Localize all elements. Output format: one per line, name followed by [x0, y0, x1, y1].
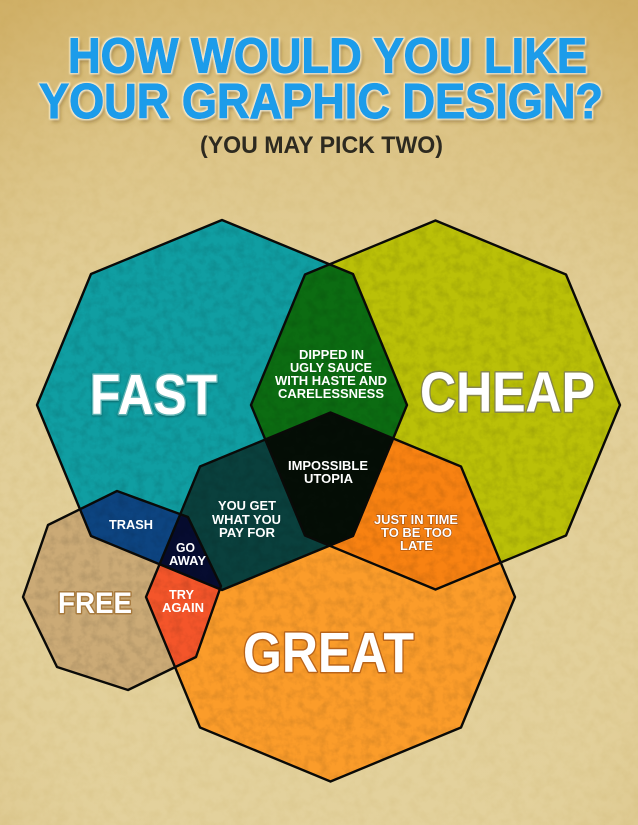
- text: go away: GO: [176, 540, 195, 555]
- circle: fast: [37, 220, 407, 590]
- venn diagram: [22, 218, 622, 783]
- overlap: fast and free: [82, 492, 179, 563]
- outlines: [23, 220, 620, 782]
- text: fast and cheap: CARELESSNESS: [278, 386, 384, 401]
- text: impossible utopia: [288, 458, 368, 486]
- text: you get what you pay for: PAY FOR: [219, 525, 276, 540]
- overlap: fast and cheap: [252, 266, 406, 438]
- overlap: fast, free and great: [161, 516, 220, 588]
- overlap: cheap and great: [333, 440, 499, 588]
- text: you get what you pay for: [212, 498, 281, 540]
- text: go away: AWAY: [169, 553, 206, 568]
- text: you get what you pay for: YOU GET: [218, 498, 276, 513]
- circle: cheap: [251, 220, 620, 590]
- text: just in time to be too late: LATE: [400, 538, 433, 553]
- circle: free: [23, 491, 221, 690]
- subtitle: (YOU MAY PICK TWO): [200, 132, 443, 159]
- label: cheap: CHEAP: [420, 360, 595, 424]
- text: impossible utopia: UTOPIA: [304, 471, 354, 486]
- text: fast and cheap: UGLY SAUCE: [290, 360, 372, 375]
- text: just in time to be too late: TO BE TOO: [381, 525, 452, 540]
- overlap: free and great: [147, 566, 218, 666]
- label: free: FREE: [58, 587, 132, 620]
- texture on shapes: [24, 222, 616, 780]
- text: trash: TRASH: [109, 517, 153, 532]
- label: great: GREAT: [243, 621, 414, 685]
- text: try again: TRY: [169, 587, 194, 602]
- text: fast and cheap: WITH HASTE AND: [275, 373, 387, 388]
- circle: great: [146, 412, 515, 782]
- text: impossible utopia: IMPOSSIBLE: [288, 458, 368, 473]
- overlap: fast and great: [182, 441, 326, 589]
- text: try again: [162, 587, 204, 615]
- text: just in time to be too late: [374, 512, 458, 553]
- title: YOUR GRAPHIC DESIGN?: [39, 75, 603, 129]
- text: you get what you pay for: WHAT YOU: [212, 512, 281, 527]
- text: fast and cheap: [275, 347, 387, 401]
- text: fast and cheap: DIPPED IN: [299, 347, 364, 362]
- text: just in time to be too late: JUST IN TIME: [374, 512, 458, 527]
- text: go away: [169, 540, 206, 568]
- title: [39, 30, 603, 129]
- overlap: fast, cheap and great: [266, 414, 392, 544]
- label: fast: FAST: [90, 363, 217, 427]
- text: try again: AGAIN: [162, 600, 204, 615]
- title: HOW WOULD YOU LIKE: [68, 30, 587, 84]
